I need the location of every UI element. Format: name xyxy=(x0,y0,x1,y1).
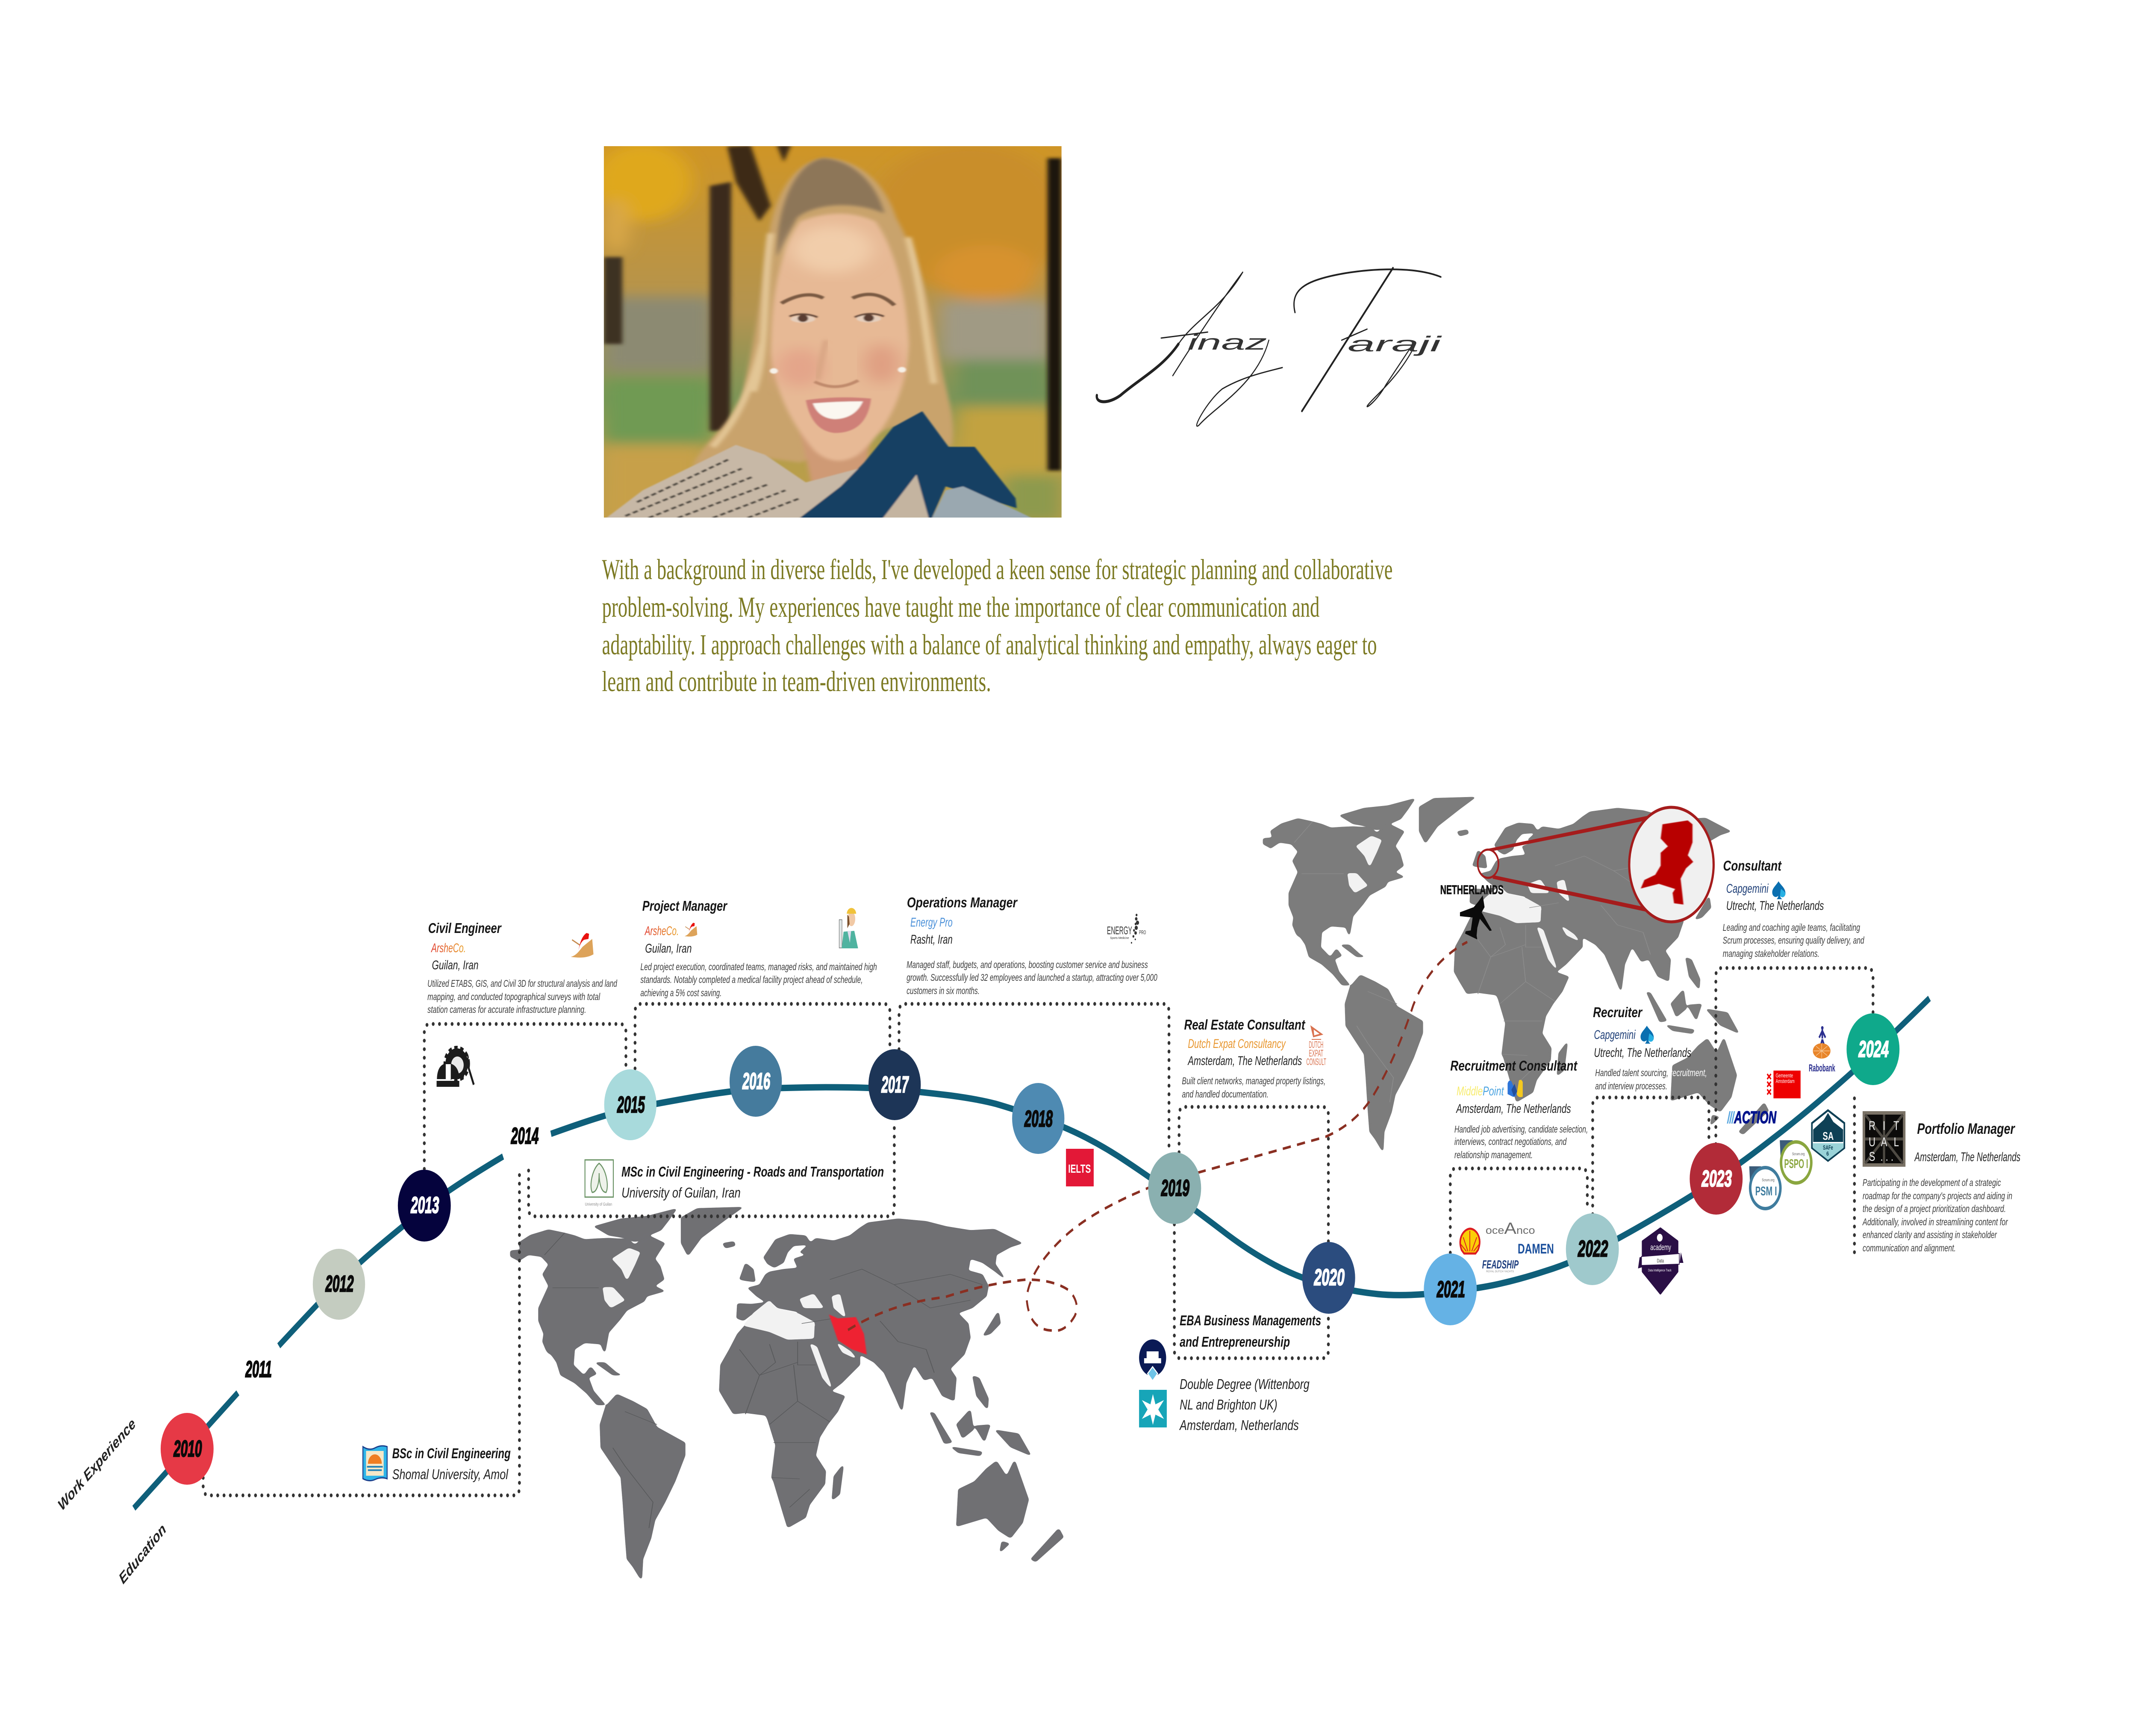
panel: real estate consultant: Real Estate Consultant xyxy=(1184,1018,1306,1033)
panel: real estate consultant: Dutch Expat Consultancy xyxy=(1188,1036,1286,1051)
logo: Energy Pro: ENERGY xyxy=(1107,924,1132,937)
connector: portfolio manager xyxy=(1852,1098,1856,1257)
badge: IELTS: IELTS xyxy=(1068,1162,1091,1176)
logo: Gemeente Amsterdam xyxy=(1767,1071,1801,1098)
year 2023: 2023 xyxy=(1701,1166,1732,1192)
panel: recruiter: recruitment, xyxy=(1670,1068,1707,1079)
logo: MiddlePoint xyxy=(1507,1080,1523,1097)
panel: consultant: Utrecht, The Netherlands xyxy=(1726,898,1824,913)
panel: recruitment consultant: Point xyxy=(1483,1084,1504,1098)
netherlands magnifier callout xyxy=(1478,807,1713,922)
badge: PSM I: PSM I xyxy=(1755,1184,1777,1198)
logo: Wittenborg xyxy=(1139,1339,1166,1381)
year 2019: 2019 xyxy=(1161,1175,1189,1201)
year 2021: 2021 xyxy=(1436,1277,1465,1303)
year 2023 xyxy=(1690,1143,1743,1215)
logo: Shomal University xyxy=(363,1446,387,1481)
panel: recruiter: Handled talent sourcing, xyxy=(1595,1068,1668,1079)
year 2022 xyxy=(1566,1213,1619,1285)
logo: Rituals: A xyxy=(1881,1135,1887,1149)
logo: ArsheCo small xyxy=(685,923,697,936)
connector: civil engineer xyxy=(424,1024,626,1169)
logo: Rituals: L xyxy=(1894,1135,1899,1149)
logo: Capgemini xyxy=(1640,1026,1654,1044)
connector: real estate consultant xyxy=(1179,1107,1328,1242)
panel: recruitment consultant: Middle xyxy=(1457,1084,1483,1098)
intro paragraph: adaptability. I approach challenges with a balance of analytical thinking and empathy, always eager to xyxy=(602,629,1377,661)
panel: EBA education: EBA Business Managements xyxy=(1180,1313,1321,1329)
logos: recruitment clients: FEADSHIP xyxy=(1482,1258,1519,1271)
logo: Rituals: I xyxy=(1883,1118,1885,1133)
panel: EBA education xyxy=(1139,1313,1321,1433)
panel: project manager: Led project execution, coordinated teams, managed risks, and maintained high xyxy=(640,962,877,973)
panel: project manager xyxy=(640,899,877,999)
panel: MSc education: University of Guilan, Iran xyxy=(621,1186,741,1201)
flight path: 2019 to Netherlands xyxy=(1198,942,1467,1173)
panel: civil engineer: mapping, and conducted topographical surveys with total xyxy=(427,992,600,1003)
year 2010: 2010 xyxy=(173,1436,202,1462)
logo: ArsheCo xyxy=(571,933,594,958)
logos: recruitment clients xyxy=(1460,1220,1554,1273)
logo: Energy Pro xyxy=(1107,914,1146,944)
badge: academy data: Data xyxy=(1657,1258,1664,1264)
badge: IELTS xyxy=(1066,1149,1094,1186)
icon: airplane xyxy=(1460,895,1492,939)
badge: PSPO I: Scrum.org xyxy=(1792,1152,1804,1156)
year 2012: 2012 xyxy=(325,1271,354,1297)
logo: Capgemini xyxy=(1772,881,1785,899)
panel: project manager: standards. Notably completed a medical facility project ahead of schedule, xyxy=(640,975,863,986)
signature: Ainaz Faraji xyxy=(1097,268,1442,426)
panel: recruiter: and interview processes. xyxy=(1595,1081,1667,1092)
panel: recruitment consultant: Handled job advertising, candidate selection, xyxy=(1454,1124,1588,1135)
sweater xyxy=(604,445,858,520)
intro paragraph xyxy=(602,553,1392,697)
year 2022: 2022 xyxy=(1578,1236,1608,1262)
world map: Iran origin xyxy=(505,1207,1064,1581)
badge: PSPO I: PSPO I xyxy=(1784,1156,1808,1171)
panel: civil engineer: Utilized ETABS, GIS, and Civil 3D for structural analysis and land xyxy=(427,979,617,989)
panel: MSc education: MSc in Civil Engineering - Roads and Transportation xyxy=(621,1165,884,1180)
icon: engineer helmet, gear, compass xyxy=(437,1048,474,1087)
photo: portrait in autumn park xyxy=(593,142,1068,522)
badge: PSPO I xyxy=(1780,1140,1811,1183)
panel: operations manager: Managed staff, budgets, and operations, boosting customer service and business xyxy=(907,960,1148,971)
panel: EBA education: NL and Brighton UK) xyxy=(1180,1398,1277,1413)
panel: operations manager: growth. Successfully led 32 employees and launched a startup, attracting over 5,000 xyxy=(907,973,1157,983)
connector: operations manager xyxy=(899,1004,1169,1150)
panel: consultant: Consultant xyxy=(1723,859,1782,874)
panel: BSc education xyxy=(363,1446,511,1483)
panel: portfolio manager xyxy=(1862,1111,2020,1254)
panel: BSc education: Shomal University, Amol xyxy=(392,1467,509,1483)
panel: operations manager: Energy Pro xyxy=(910,915,953,930)
connector: project manager xyxy=(635,1004,890,1068)
logo: Rituals xyxy=(1863,1111,1905,1167)
connector: recruitment consultant xyxy=(1450,1168,1587,1253)
logo: Shell xyxy=(1460,1229,1480,1253)
badge: PSM I xyxy=(1749,1166,1781,1209)
year 2024 xyxy=(1846,1013,1899,1085)
logo: Rituals: T xyxy=(1893,1118,1899,1133)
badge: SAFe SA: SA xyxy=(1822,1130,1834,1142)
year 2015 xyxy=(604,1069,656,1140)
panel: consultant: Scrum processes, ensuring quality delivery, and xyxy=(1723,936,1864,946)
panel: portfolio manager: roadmap for the company's projects and aiding in xyxy=(1863,1191,2012,1202)
signature: Ainaz Faraji: inaz xyxy=(1188,331,1267,354)
panel: project manager: achieving a 5% cost saving. xyxy=(640,988,722,999)
logo: Action: ACTION xyxy=(1734,1108,1777,1127)
timeline line xyxy=(134,998,1929,1508)
logo: Gemeente Amsterdam: Amsterdam xyxy=(1776,1079,1795,1084)
logo: Rituals: S xyxy=(1869,1149,1875,1164)
track label: education: Education xyxy=(116,1520,168,1587)
panel: recruiter: Utrecht, The Netherlands xyxy=(1594,1045,1691,1060)
year 2016: 2016 xyxy=(742,1068,770,1095)
logos: recruitment clients: oce A nco xyxy=(1486,1220,1535,1238)
logo: Rabobank xyxy=(1809,1026,1835,1074)
panel: recruitment consultant: Recruitment Consultant xyxy=(1450,1059,1578,1074)
panel: consultant xyxy=(1723,859,1864,959)
logo: Rituals: R xyxy=(1869,1118,1875,1133)
panel: civil engineer: Guilan, Iran xyxy=(432,958,479,972)
year 2013 xyxy=(398,1170,451,1242)
world map: Netherlands destination xyxy=(1258,797,1769,1153)
year 2013: 2013 xyxy=(410,1192,439,1218)
logo: Dutch Expat Consult: CONSULT xyxy=(1306,1057,1326,1068)
connector: recruiter xyxy=(1592,1098,1709,1214)
year 2020 xyxy=(1302,1242,1355,1314)
panel: real estate consultant: Amsterdam, The Netherlands xyxy=(1187,1053,1302,1068)
logo: Energy Pro: Sports Medicine xyxy=(1110,936,1129,940)
year 2024: 2024 xyxy=(1858,1036,1889,1062)
year 2017 xyxy=(868,1049,921,1120)
year 2021 xyxy=(1424,1253,1477,1325)
panel: civil engineer: ArsheCo. xyxy=(431,941,466,955)
face xyxy=(771,214,909,461)
panel: portfolio manager: Amsterdam, The Netherlands xyxy=(1914,1150,2020,1164)
panel: portfolio manager: Portfolio Manager xyxy=(1917,1120,2016,1137)
panel: BSc education: BSc in Civil Engineering xyxy=(392,1446,511,1462)
panel: recruiter: Recruiter xyxy=(1593,1005,1643,1021)
panel: civil engineer xyxy=(427,921,617,1015)
label: netherlands: NETHERLANDS xyxy=(1440,883,1504,897)
panel: recruitment consultant: relationship management. xyxy=(1454,1150,1533,1161)
panel: consultant: Capgemini xyxy=(1726,881,1769,896)
panel: EBA education: and Entrepreneurship xyxy=(1180,1335,1290,1350)
scarf xyxy=(797,411,1017,520)
map highlight: Iran xyxy=(829,1315,867,1355)
year 2012 xyxy=(313,1249,365,1320)
icon: woman engineer xyxy=(839,908,858,948)
logo: Dutch Expat Consult: DUTCH xyxy=(1309,1040,1323,1050)
panel: project manager: Project Manager xyxy=(642,899,728,914)
badge: academy data xyxy=(1638,1229,1684,1293)
panel: real estate consultant: Built client networks, managed property listings, xyxy=(1182,1076,1325,1087)
badge: PSM I: Scrum.org xyxy=(1762,1178,1775,1182)
panel: recruitment consultant xyxy=(1450,1059,1588,1161)
logo: Rabobank: Rabobank xyxy=(1809,1063,1835,1074)
logo: University of Brighton xyxy=(1139,1390,1167,1427)
connector: consultant xyxy=(1716,968,1873,1144)
badge: SAFe SA xyxy=(1812,1110,1844,1161)
logo: Energy Pro: PRO xyxy=(1139,930,1146,936)
track label: work experience: Work Experience xyxy=(55,1415,138,1514)
logo: Rituals: U xyxy=(1869,1135,1875,1149)
panel: recruitment consultant: Amsterdam, The Netherlands xyxy=(1456,1101,1571,1116)
connector: MSc xyxy=(529,1126,894,1216)
panel: real estate consultant: and handled documentation. xyxy=(1182,1089,1269,1100)
panel: portfolio manager: communication and alignment. xyxy=(1863,1243,1956,1254)
year 2018 xyxy=(1012,1083,1064,1154)
logo: University of Guilan: University of Guilan xyxy=(585,1202,612,1206)
panel: consultant: Leading and coaching agile teams, facilitating xyxy=(1723,923,1860,933)
panel: civil engineer: station cameras for accurate infrastructure planning. xyxy=(427,1005,586,1015)
panel: real estate consultant xyxy=(1182,1018,1326,1100)
connector: BSc xyxy=(203,1174,519,1495)
neck xyxy=(805,444,870,481)
panel: operations manager: Rasht, Iran xyxy=(910,932,953,947)
panel: portfolio manager: Participating in the development of a strategic xyxy=(1863,1178,2001,1189)
logo: Gemeente Amsterdam: Gemeente xyxy=(1776,1073,1793,1079)
panel: project manager: Guilan, Iran xyxy=(645,941,692,956)
panel: operations manager xyxy=(907,895,1157,997)
panel: EBA education: Amsterdam, Netherlands xyxy=(1179,1418,1299,1433)
year 2010 xyxy=(161,1413,214,1485)
badge: SAFe SA: 6 xyxy=(1826,1150,1829,1157)
panel: MSc education xyxy=(585,1160,884,1206)
panel: portfolio manager: Additionally, involved in streamlining content for xyxy=(1862,1217,2008,1228)
panel: civil engineer: Civil Engineer xyxy=(428,921,502,936)
badge: academy data: academy xyxy=(1650,1243,1671,1252)
panel: recruiter: Capgemini xyxy=(1594,1027,1636,1042)
panel: portfolio manager: enhanced clarity and assisting in stakeholder xyxy=(1863,1230,1997,1241)
year 2018: 2018 xyxy=(1024,1106,1053,1132)
year 2014: 2014 xyxy=(511,1123,539,1149)
signature: Ainaz Faraji: araji xyxy=(1348,332,1442,356)
year 2017: 2017 xyxy=(881,1072,909,1098)
intro paragraph: With a background in diverse fields, I've developed a keen sense for strategic planning and collaborative xyxy=(602,553,1392,586)
year 2015: 2015 xyxy=(617,1092,645,1118)
hair xyxy=(692,158,953,467)
panel: portfolio manager: the design of a project prioritization dashboard. xyxy=(1863,1204,2006,1215)
logos: recruitment clients: DAMEN xyxy=(1518,1242,1554,1256)
panel: recruitment consultant: interviews, contract negotiations, and xyxy=(1454,1137,1567,1148)
panel: recruiter xyxy=(1593,1005,1707,1092)
logo: Dutch Expat Consult xyxy=(1306,1027,1326,1068)
year 2020: 2020 xyxy=(1314,1265,1345,1291)
panel: consultant: managing stakeholder relations. xyxy=(1723,949,1819,959)
badge: SAFe SA: SAFe xyxy=(1823,1144,1833,1151)
year 2019 xyxy=(1148,1152,1201,1224)
badge: academy data: Data Intelligence Track xyxy=(1648,1269,1672,1272)
panel: project manager: ArsheCo. xyxy=(644,924,679,938)
logos: recruitment clients: ROYAL DUTCH YACHTS xyxy=(1486,1270,1514,1273)
logo: Dutch Expat Consult: EXPAT xyxy=(1309,1049,1323,1059)
year 2011: 2011 xyxy=(245,1356,272,1383)
logo: University of Guilan xyxy=(585,1160,613,1206)
intro paragraph: learn and contribute in team-driven environments. xyxy=(602,665,991,697)
netherlands silhouette xyxy=(1641,821,1693,905)
logo: Rituals: . . . xyxy=(1880,1149,1893,1164)
flight path: Iran to 2019 xyxy=(848,1188,1149,1331)
intro paragraph: problem-solving. My experiences have taught me the importance of clear communication and xyxy=(602,591,1320,623)
connector: EBA xyxy=(1174,1224,1328,1358)
panel: operations manager: customers in six months. xyxy=(907,986,980,997)
panel: operations manager: Operations Manager xyxy=(907,895,1018,911)
year 2016 xyxy=(730,1046,782,1117)
panel: EBA education: Double Degree (Wittenborg xyxy=(1180,1377,1310,1392)
